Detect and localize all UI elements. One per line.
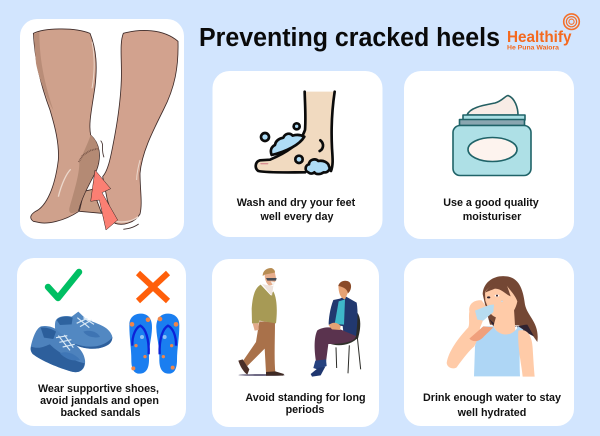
icon: green check — [48, 272, 79, 298]
illustration: woman drinking water — [447, 276, 538, 377]
illustration: elderly man walking — [238, 268, 285, 376]
panel: supportive shoes — [17, 258, 186, 426]
logo: Healthify He Puna Waiora: He Puna Waiora — [507, 44, 559, 52]
icon: blue jandals — [129, 314, 179, 374]
caption — [443, 197, 539, 223]
title: Preventing cracked heels — [199, 24, 500, 52]
caption — [38, 383, 159, 419]
icon: blue shoes — [31, 312, 112, 372]
panel: cracked heels illustration — [20, 19, 184, 239]
caption — [423, 392, 561, 419]
illustration: man seated on chair — [311, 281, 361, 377]
caption: periods — [286, 404, 324, 416]
caption: backed sandals — [60, 407, 141, 419]
caption — [245, 392, 366, 416]
icon: moisturiser jar — [453, 96, 531, 176]
logo: Healthify He Puna Waiora — [507, 14, 579, 51]
panel: avoid standing — [212, 259, 379, 427]
panel: wash and dry feet — [212, 71, 382, 237]
caption: Wear supportive shoes, — [38, 383, 159, 395]
panel: drink water — [404, 258, 574, 426]
icon: orange cross — [138, 273, 168, 301]
icon: washing foot with soap — [256, 92, 335, 174]
caption: avoid jandals and open — [40, 395, 159, 407]
caption: Drink enough water to stay — [423, 392, 561, 404]
arrow: red pointing to heel — [91, 170, 118, 230]
caption: well hydrated — [457, 407, 526, 419]
caption — [237, 197, 356, 223]
caption: Wash and dry your feet — [237, 197, 356, 209]
caption: Use a good quality — [443, 197, 539, 209]
caption: Avoid standing for long — [245, 392, 366, 404]
panel: moisturiser — [404, 71, 574, 239]
caption: moisturiser — [463, 211, 522, 223]
logo: Healthify He Puna Waiora: Healthify — [507, 29, 572, 46]
illustration: legs with cracked heel — [31, 29, 178, 230]
caption: well every day — [260, 211, 333, 223]
